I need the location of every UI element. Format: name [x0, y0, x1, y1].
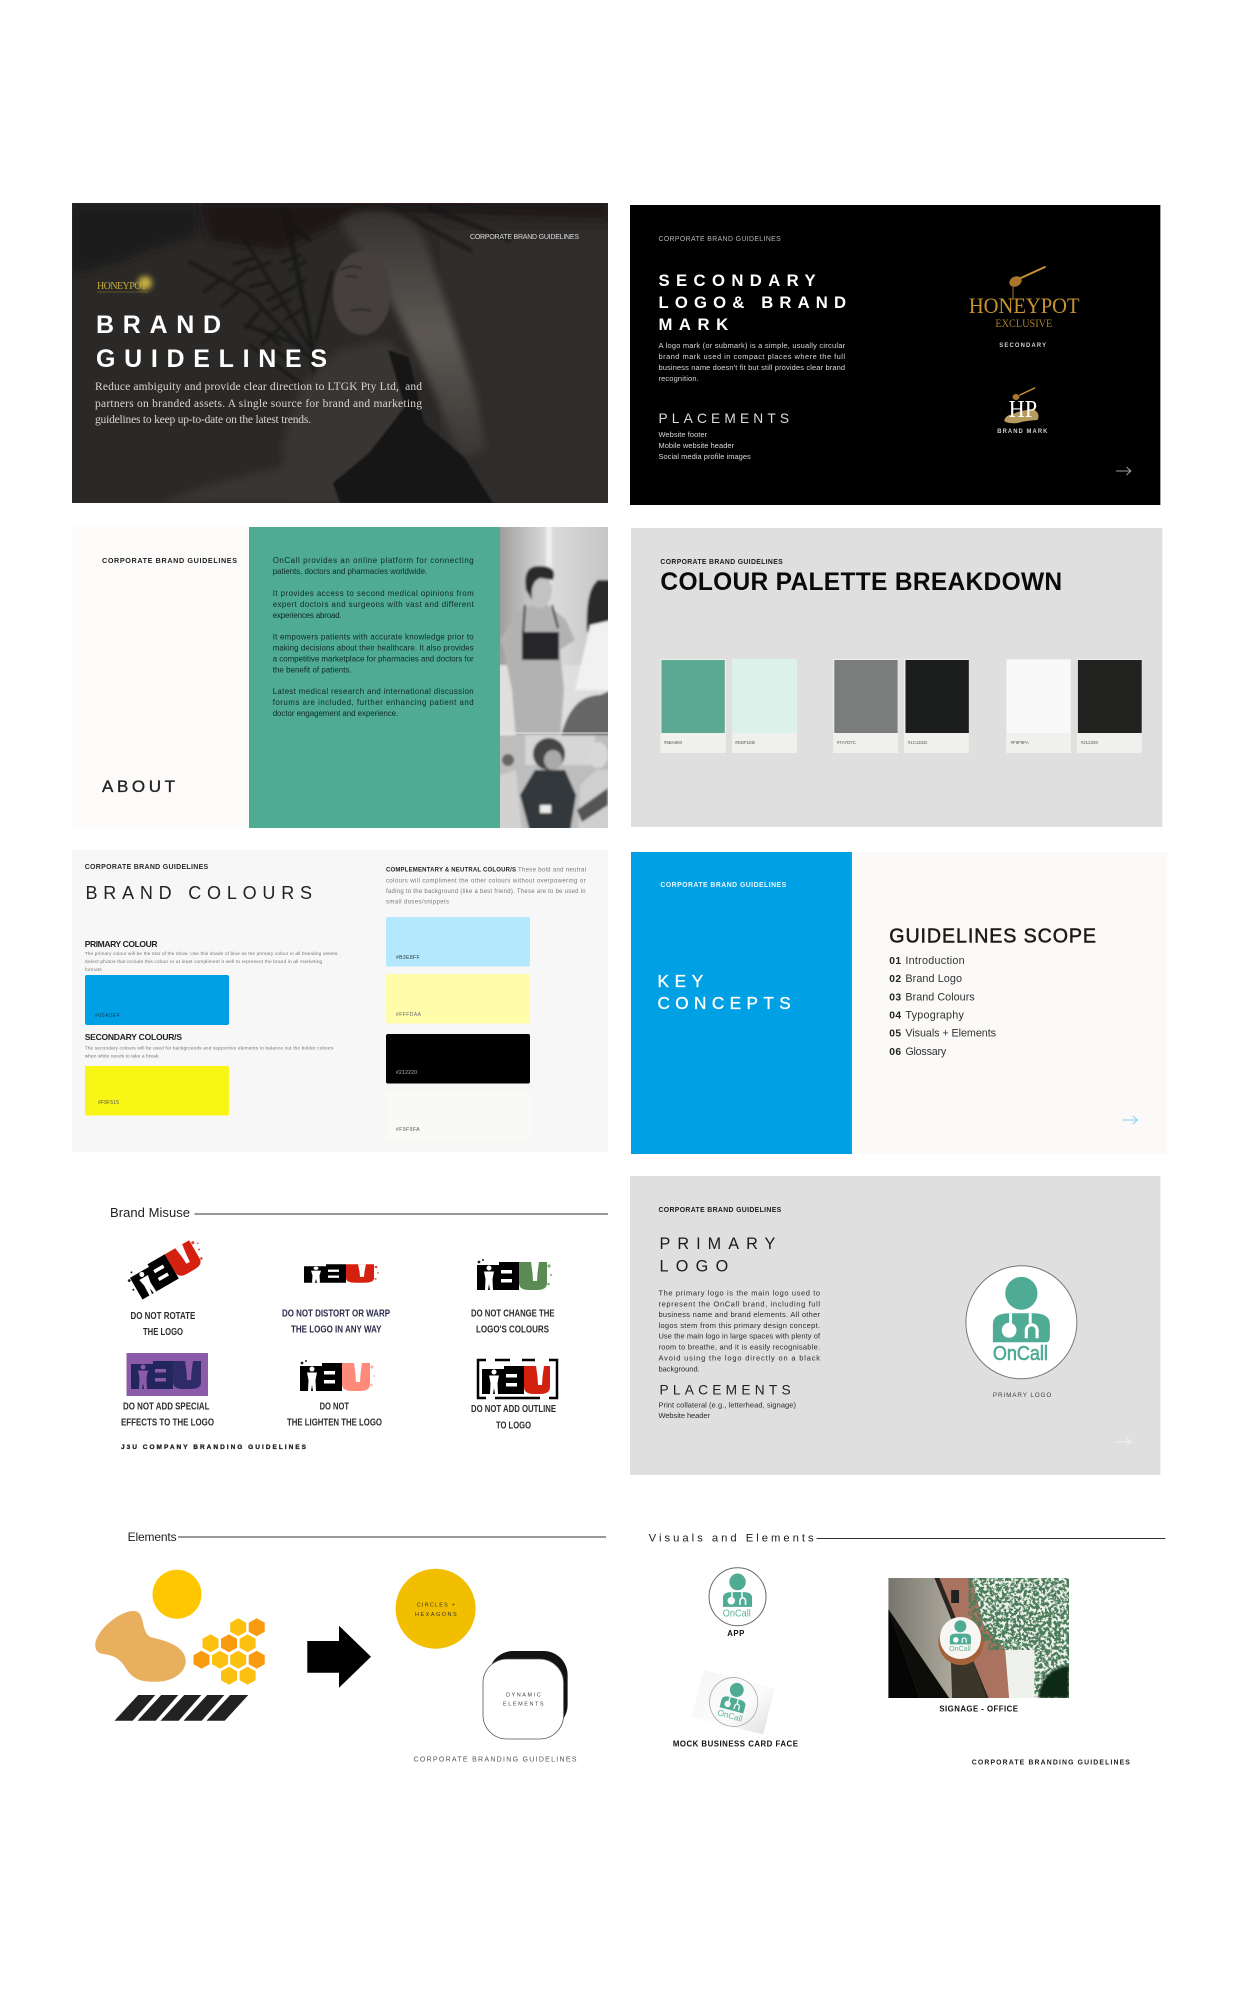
swatch: #1C1D1D — [904, 659, 969, 753]
list: scope contents: 05 — [889, 1029, 901, 1040]
swatch: black: #212220 — [396, 1070, 417, 1076]
list: scope contents: Visuals + Elements — [905, 1028, 997, 1040]
list: scope contents: Brand Logo — [905, 973, 962, 985]
text: about OnCall: experiences abroad. — [273, 611, 342, 620]
text: about OnCall: OnCall provides an online platform for connecting — [273, 556, 474, 565]
mockup: business card — [691, 1670, 775, 1734]
text: about OnCall: a competitive marketplace for pharmacies and doctors for — [273, 654, 474, 664]
shape: honeycomb hexagons — [194, 1618, 265, 1685]
caption: do not lighten: DO NOT — [320, 1401, 349, 1412]
text: placements list — [658, 430, 751, 461]
mockup: business card: OnCall — [716, 1707, 744, 1724]
logo: honeypot exclusive secondary: HONEYPOT — [969, 294, 1080, 318]
panel: brand misuse — [110, 1205, 608, 1451]
caption: do not change colours — [471, 1308, 555, 1336]
label: brand mark: BRAND MARK — [997, 429, 1048, 435]
panel: primary logo — [630, 1176, 1160, 1475]
label: corporate brand guidelines: CORPORATE BRAND GUIDELINES — [658, 236, 781, 243]
heading: guidelines scope: GUIDELINES SCOPE — [889, 926, 1096, 948]
text: logo mark description: brand mark used in compact places where the full — [658, 352, 845, 361]
text: about OnCall: Latest medical research and international discussion — [273, 687, 474, 696]
text: about OnCall: expert doctors and surgeons with vast and different — [273, 600, 474, 609]
text: placements list — [658, 1400, 796, 1420]
label: corporate brand guidelines: CORPORATE BRAND GUIDELINES — [102, 556, 237, 565]
text: secondary colour: when white needs to take a break. — [85, 1054, 160, 1060]
text: cover description: partners on branded assets. A single source for brand and marketing — [95, 398, 422, 410]
heading: secondary logo and brand mark: SECONDARY — [658, 271, 816, 290]
label: corporate brand guidelines: CORPORATE BRAND GUIDELINES — [470, 234, 579, 241]
text: cover description: Reduce ambiguity and provide clear direction to LTGK Pty Ltd, and — [95, 381, 422, 393]
label: corporate brand guidelines: CORPORATE BRAND GUIDELINES — [660, 882, 787, 889]
text: primary colour: PRIMARY COLOUR — [85, 939, 158, 949]
text: placements list: Mobile website header — [658, 441, 735, 450]
text: complementary and neutral colours: COMPLEMENTARY & NEUTRAL COLOUR/S — [386, 868, 516, 874]
text: about OnCall: making decisions about their healthcare. It also provides — [273, 644, 474, 652]
logo: OnCall primary — [966, 1266, 1077, 1379]
swatch: off white — [386, 1091, 530, 1140]
text: logo mark description: business name doesn't fit but still provides clear brand — [658, 363, 845, 372]
text: complementary and neutral colours — [386, 868, 586, 906]
swatch: #212220: #212220 — [1081, 740, 1098, 745]
heading: secondary logo and brand mark: LOGO& BRAND — [658, 293, 846, 312]
caption: do not distort: DO NOT DISTORT OR WARP — [282, 1308, 390, 1319]
text: primary logo description — [658, 1289, 821, 1373]
text: placements list: Social media profile images — [658, 452, 751, 461]
logo: honeypot exclusive secondary — [969, 267, 1080, 330]
heading: brand misuse: Brand Misuse — [110, 1205, 190, 1220]
photo: doctor and patient — [496, 523, 612, 832]
list: scope contents — [889, 955, 997, 1058]
list: scope contents: 03 — [889, 992, 901, 1003]
heading: brand guidelines — [96, 311, 327, 373]
callout: dynamic elements: ELEMENTS — [503, 1702, 544, 1708]
swatch: #F9F9FA: #F9F9FA — [1011, 740, 1029, 745]
heading: key concepts: KEY — [657, 971, 704, 991]
text: primary colour: The primary colour will be the star of the show. Use this shade of blue as the primary colour in all branding assets. — [85, 951, 339, 957]
text: primary logo description: background. — [658, 1364, 700, 1373]
caption: do not distort — [282, 1308, 390, 1336]
heading: brand guidelines: BRAND — [96, 311, 221, 339]
list: scope contents: 01 — [889, 956, 901, 967]
text: primary logo description: room to breathe, and it is easily recognisable. — [658, 1343, 820, 1352]
text: primary logo description: Avoid using the logo directly on a black — [658, 1354, 820, 1363]
swatch: off white: #F9F9FA — [396, 1127, 420, 1133]
swatch: pale yellow — [386, 974, 530, 1024]
heading: secondary logo and brand mark: MARK — [658, 315, 728, 334]
text: complementary and neutral colours: These bold and neutral — [518, 868, 586, 874]
label: secondary: SECONDARY — [999, 343, 1046, 349]
logo: honeypot: HONEYPOT — [97, 281, 147, 292]
label: signage office: SIGNAGE - OFFICE — [939, 1704, 1018, 1713]
heading: key concepts — [657, 971, 791, 1013]
label: corporate branding guidelines: CORPORATE BRANDING GUIDELINES — [414, 1757, 577, 1764]
caption: do not add outline: DO NOT ADD OUTLINE — [471, 1404, 556, 1415]
label: corporate brand guidelines: CORPORATE BRAND GUIDELINES — [85, 864, 209, 871]
logo: rotated — [124, 1235, 209, 1301]
heading: key concepts: CONCEPTS — [657, 993, 791, 1013]
caption: do not change colours: DO NOT CHANGE THE — [471, 1308, 555, 1319]
callout: circles and hexagons — [396, 1569, 476, 1649]
swatch: #1C1D1D: #1C1D1D — [908, 740, 927, 745]
text: primary logo description: represent the OnCall brand, including full — [658, 1299, 820, 1308]
shape: yellow circle — [152, 1570, 202, 1619]
text: primary logo description: logos stem from this primary design concept. — [658, 1321, 820, 1330]
callout: dynamic elements — [483, 1651, 568, 1739]
arrow: large black — [307, 1626, 371, 1688]
panel: secondary logo and brand mark — [630, 205, 1160, 505]
caption: do not add effects: EFFECTS TO THE LOGO — [121, 1418, 214, 1429]
text: placements list: Website footer — [658, 430, 708, 439]
heading: primary logo: PRIMARY — [659, 1235, 775, 1253]
caption: do not distort: THE LOGO IN ANY WAY — [291, 1325, 382, 1336]
heading: primary logo — [659, 1235, 775, 1276]
photo: office signage: OnCall — [949, 1646, 971, 1653]
caption: do not rotate: DO NOT ROTATE — [130, 1311, 196, 1322]
text: about OnCall: It provides access to second medical opinions from — [273, 589, 474, 598]
panel: brand colours — [72, 850, 608, 1152]
text: about OnCall: It empowers patients with accurate knowledge prior to — [273, 632, 474, 642]
swatch: #F9F9FA — [1006, 659, 1071, 753]
text: about OnCall: the benefit of patients. — [273, 666, 352, 674]
text: secondary colour: SECONDARY COLOUR/S — [85, 1032, 182, 1042]
heading: placements: PLACEMENTS — [659, 1381, 791, 1397]
caption: do not lighten: THE LIGHTEN THE LOGO — [287, 1418, 382, 1429]
label: app: APP — [727, 1629, 744, 1638]
panel: brand guidelines cover — [72, 203, 608, 503]
callout: circles and hexagons: CIRCLES + — [417, 1603, 455, 1609]
swatch: primary blue — [85, 975, 229, 1025]
swatch: #7A7D7C: #7A7D7C — [837, 740, 857, 745]
text: placements list: Print collateral (e.g., letterhead, signage) — [658, 1400, 796, 1409]
label: primary logo: PRIMARY LOGO — [993, 1392, 1051, 1399]
label: mock business card face: MOCK BUSINESS CARD FACE — [673, 1740, 798, 1749]
text: primary colour: Select photos that include this colour or at least compliment it well to represent the brand in all marketing — [85, 959, 323, 965]
swatch: #7A7D7C — [833, 659, 898, 753]
label: J3U company branding guidelines: J3U COMPANY BRANDING GUIDELINES — [121, 1444, 307, 1451]
logo: lightened — [300, 1360, 375, 1391]
caption: do not rotate: THE LOGO — [143, 1327, 183, 1338]
label: corporate brand guidelines: CORPORATE BRAND GUIDELINES — [658, 1207, 782, 1214]
heading: primary logo: LOGO — [659, 1258, 728, 1276]
shape: diagonal stripes — [114, 1695, 248, 1721]
heading: placements: PLACEMENTS — [658, 410, 789, 426]
text: about OnCall — [273, 556, 474, 718]
panel: colour palette breakdown — [631, 528, 1162, 827]
text: about OnCall: patients, doctors and pharmacies worldwide. — [273, 567, 427, 576]
swatch: #DDF1EB — [732, 659, 797, 753]
swatch: #DDF1EB: #DDF1EB — [735, 740, 755, 745]
text: complementary and neutral colours: colours will compliment the other colours without overpowering or — [386, 878, 586, 884]
list: scope contents: Brand Colours — [905, 991, 975, 1003]
logo: distorted — [304, 1264, 379, 1283]
swatch: black — [386, 1034, 530, 1084]
logo: honeypot exclusive secondary: EXCLUSIVE — [995, 318, 1052, 330]
text: about OnCall: doctor engagement and experience. — [273, 709, 398, 718]
shape: tan blob — [95, 1611, 186, 1682]
panel: visuals and elements — [649, 1533, 1165, 1766]
heading: secondary logo and brand mark — [658, 271, 846, 334]
caption: do not add outline — [471, 1404, 556, 1431]
text: placements list: Website header — [658, 1411, 710, 1420]
text: primary logo description: The primary logo is the main logo used to — [658, 1289, 820, 1298]
panel: key concepts — [631, 852, 1167, 1154]
logo: with outline — [478, 1360, 557, 1398]
heading: about: ABOUT — [102, 777, 175, 796]
text: complementary and neutral colours: small doses/snippets — [386, 900, 449, 906]
swatch: pale yellow: #FFFDAA — [396, 1012, 422, 1018]
caption: do not add effects — [121, 1401, 214, 1429]
heading: brand colours: BRAND COLOURS — [86, 883, 312, 903]
logo: honeypot — [97, 276, 152, 292]
caption: do not change colours: LOGO'S COLOURS — [476, 1325, 549, 1336]
label: corporate branding guidelines: CORPORATE BRANDING GUIDELINES — [972, 1759, 1130, 1766]
caption: do not rotate — [130, 1311, 196, 1338]
swatch: #212220 — [1077, 659, 1142, 753]
callout: circles and hexagons: HEXAGONS — [415, 1612, 457, 1618]
text: about OnCall: forums are included, further enhancing patient and — [273, 698, 474, 707]
photo: office signage — [888, 1578, 1069, 1698]
panel: elements — [95, 1530, 606, 1764]
text: primary colour: formats — [85, 967, 102, 973]
caption: do not add outline: TO LOGO — [496, 1420, 531, 1431]
logo: changed colours — [477, 1259, 552, 1290]
list: scope contents: 06 — [889, 1047, 901, 1058]
logo: OnCall app icon: OnCall — [723, 1609, 751, 1620]
list: scope contents: 04 — [889, 1011, 901, 1022]
heading: brand guidelines: GUIDELINES — [96, 345, 327, 373]
block: green about text background — [249, 527, 500, 828]
text: cover description: guidelines to keep up-to-date on the latest trends. — [95, 414, 311, 426]
caption: do not add effects: DO NOT ADD SPECIAL — [123, 1401, 210, 1412]
list: scope contents: Typography — [905, 1010, 964, 1022]
text: primary logo description: business name and brand elements. All other — [658, 1310, 821, 1319]
heading: elements: Elements — [128, 1530, 177, 1544]
text: secondary colour: The secondary colours will be used for backgrounds and supportive elements to balance out the bolder colours — [85, 1046, 334, 1052]
block: guidelines scope background — [852, 852, 1167, 1154]
panel: about — [72, 523, 612, 832]
swatch: secondary yellow — [85, 1066, 229, 1116]
logo: OnCall primary: OnCall — [993, 1343, 1048, 1365]
text: primary colour — [85, 939, 339, 973]
list: scope contents: 02 — [889, 974, 901, 985]
callout: dynamic elements: DYNAMIC — [506, 1692, 541, 1698]
swatch: light blue — [386, 917, 530, 966]
label: corporate brand guidelines: CORPORATE BRAND GUIDELINES — [660, 559, 783, 566]
list: scope contents: Glossary — [905, 1046, 947, 1058]
photo: woman with palm fronds — [72, 203, 608, 503]
arrow: next — [1116, 467, 1131, 475]
text: secondary colour — [85, 1032, 334, 1060]
text: complementary and neutral colours: fading to the background (like a best friend). These are to be used in — [386, 889, 586, 895]
heading: visuals and elements: Visuals and Elements — [649, 1533, 814, 1545]
text: logo mark description: A logo mark (or submark) is a simple, usually circular — [658, 341, 846, 350]
caption: do not lighten — [287, 1401, 382, 1429]
swatch: #5BA893: #5BA893 — [664, 740, 683, 745]
text: primary logo description: Use the main logo in large spaces with plenty of — [658, 1332, 821, 1341]
swatch: light blue: #B3E8FF — [396, 955, 420, 961]
arrow: next — [1116, 1438, 1131, 1446]
heading: colour palette breakdown: COLOUR PALETTE BREAKDOWN — [660, 569, 1062, 596]
swatch: #5BA893 — [660, 659, 726, 753]
logo: HP brand mark — [1004, 388, 1039, 423]
text: cover description — [95, 381, 422, 426]
logo: HP brand mark: HP — [1009, 397, 1037, 423]
swatch: secondary yellow: #F9F515 — [98, 1100, 119, 1106]
logo: OnCall app icon — [709, 1568, 766, 1626]
text: logo mark description: recognition. — [658, 374, 699, 383]
logo: special effects purple — [126, 1353, 208, 1396]
arrow: next — [1123, 1116, 1137, 1124]
swatch: primary blue: #00A0E4 — [95, 1013, 120, 1019]
list: scope contents: Introduction — [905, 955, 965, 967]
text: logo mark description — [658, 341, 846, 383]
